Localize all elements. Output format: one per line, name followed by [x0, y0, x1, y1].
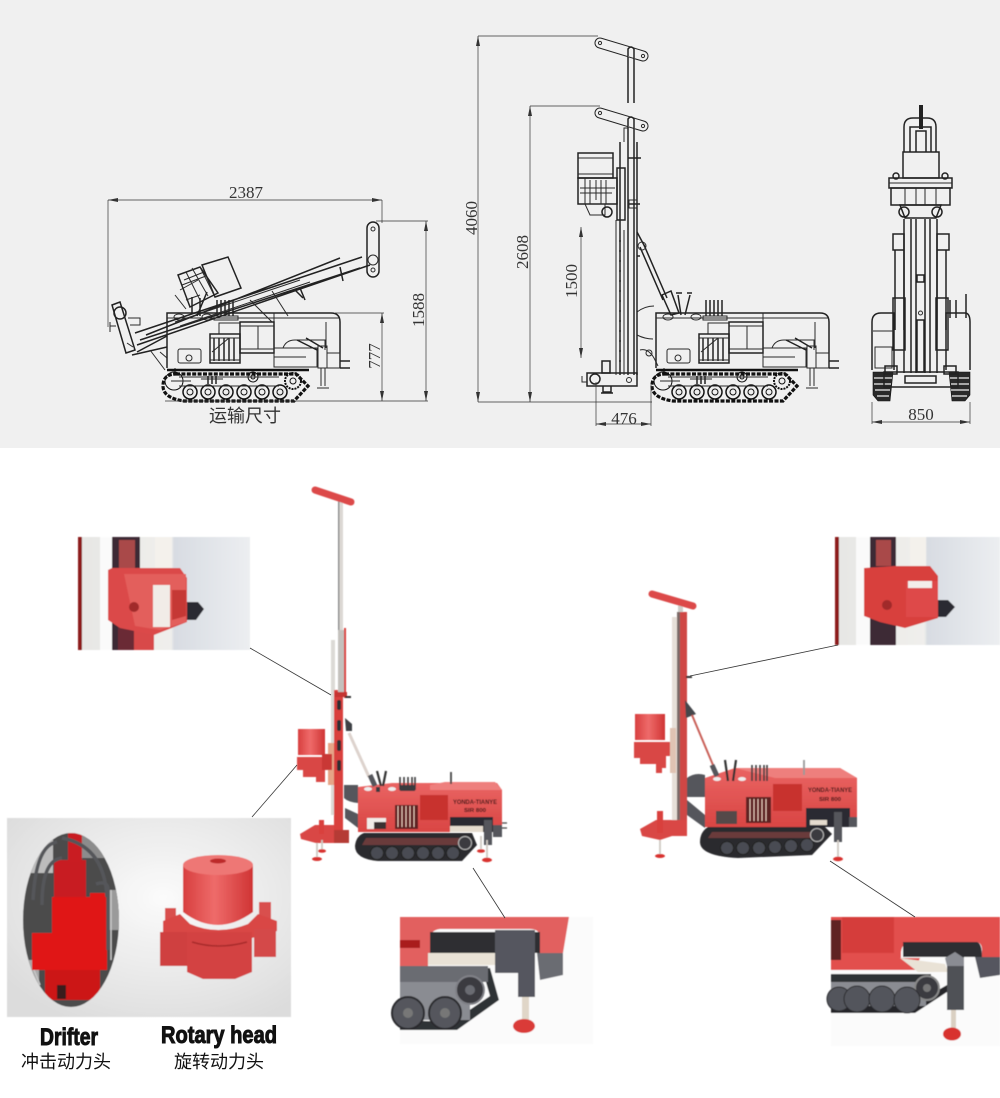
- crawler track: [355, 833, 477, 861]
- body logo: YONDA-TIANYE: [453, 799, 498, 806]
- mast front: [893, 219, 949, 373]
- brace: [692, 715, 713, 765]
- carrier line art (working): [652, 300, 839, 401]
- drifter photo: [23, 833, 119, 1007]
- base and jacks: [300, 820, 492, 862]
- panel: drifter and rotary head: [7, 818, 291, 1017]
- caption: drifter: Drifter: [40, 1024, 98, 1051]
- caption: rotary head: 旋转动力头: [174, 1052, 264, 1072]
- panel: dimension drawings background: [0, 0, 1000, 448]
- rotary head side: [578, 153, 617, 217]
- base and jacks: [640, 811, 843, 861]
- caption: rotary head: [161, 1022, 277, 1072]
- connector lines: [250, 645, 915, 918]
- dimension 2387: [108, 183, 382, 327]
- caption: drifter: 冲击动力头: [21, 1052, 111, 1072]
- callout: bottom-left jack detail: [392, 917, 593, 1044]
- caption: rotary head: Rotary head: [161, 1022, 277, 1049]
- dimension 476: 476: [611, 409, 637, 428]
- dimension 1588: [165, 221, 428, 401]
- handle and upper rod: [652, 594, 693, 620]
- dimension 4060: 4060: [462, 201, 481, 235]
- body logo: SIR 800: [819, 797, 841, 803]
- callout: top-left detail of guide, open: [78, 537, 250, 650]
- drawing: front view: [872, 105, 970, 424]
- carrier and tracks front: [872, 294, 970, 401]
- grey brackets: [344, 785, 358, 828]
- mast: [331, 628, 352, 835]
- rotary head front: [889, 105, 952, 218]
- dimension 1588: 1588: [409, 293, 428, 327]
- dimension 850: [872, 402, 970, 424]
- mast folded over carrier: [110, 222, 379, 370]
- body logo: [453, 799, 498, 814]
- dimension 777: [335, 313, 384, 401]
- drawing: transport dimensions side view: [108, 183, 428, 426]
- machine 1: red drill rig, left: [297, 490, 507, 862]
- dimension 4060: [462, 36, 652, 402]
- body: [705, 760, 857, 842]
- body logo: SIR 800: [464, 808, 486, 814]
- caption: transport size: 运输尺寸: [209, 406, 281, 426]
- rotary head photo: [160, 855, 277, 979]
- dimension 2387: 2387: [229, 183, 264, 202]
- caption: drifter: [21, 1024, 111, 1072]
- callout: top-right detail of guide, closed: [835, 537, 1000, 645]
- mast: [672, 612, 696, 827]
- grey brackets: [687, 774, 705, 828]
- body: [358, 771, 507, 845]
- drawing: working dimensions side view: [462, 36, 839, 428]
- dimension 850: 850: [908, 405, 934, 424]
- crawler close-up: [827, 974, 947, 1013]
- carrier line art (transport): [163, 300, 350, 401]
- body logo: [808, 787, 853, 803]
- dimension 1500: 1500: [562, 264, 581, 298]
- brace cylinder: [637, 232, 692, 366]
- dimension 2608: 2608: [513, 235, 532, 269]
- mast with raised and lowered rods: [582, 41, 645, 393]
- crawler close-up: [392, 966, 499, 1030]
- dimension 777: 777: [365, 343, 384, 369]
- dimension 1500: [562, 227, 581, 358]
- callout: bottom-right jack detail: [827, 917, 1000, 1046]
- rotary head tilted: [175, 257, 241, 316]
- brace: [349, 733, 369, 777]
- dimension 476: [596, 382, 651, 428]
- rotary head: [297, 729, 334, 785]
- crawler track: [700, 827, 832, 858]
- rotary head: [634, 714, 676, 773]
- machine 2: red drill rig, right: [634, 594, 857, 861]
- body logo: YONDA-TIANYE: [808, 787, 853, 794]
- handle and upper rod: [315, 490, 351, 647]
